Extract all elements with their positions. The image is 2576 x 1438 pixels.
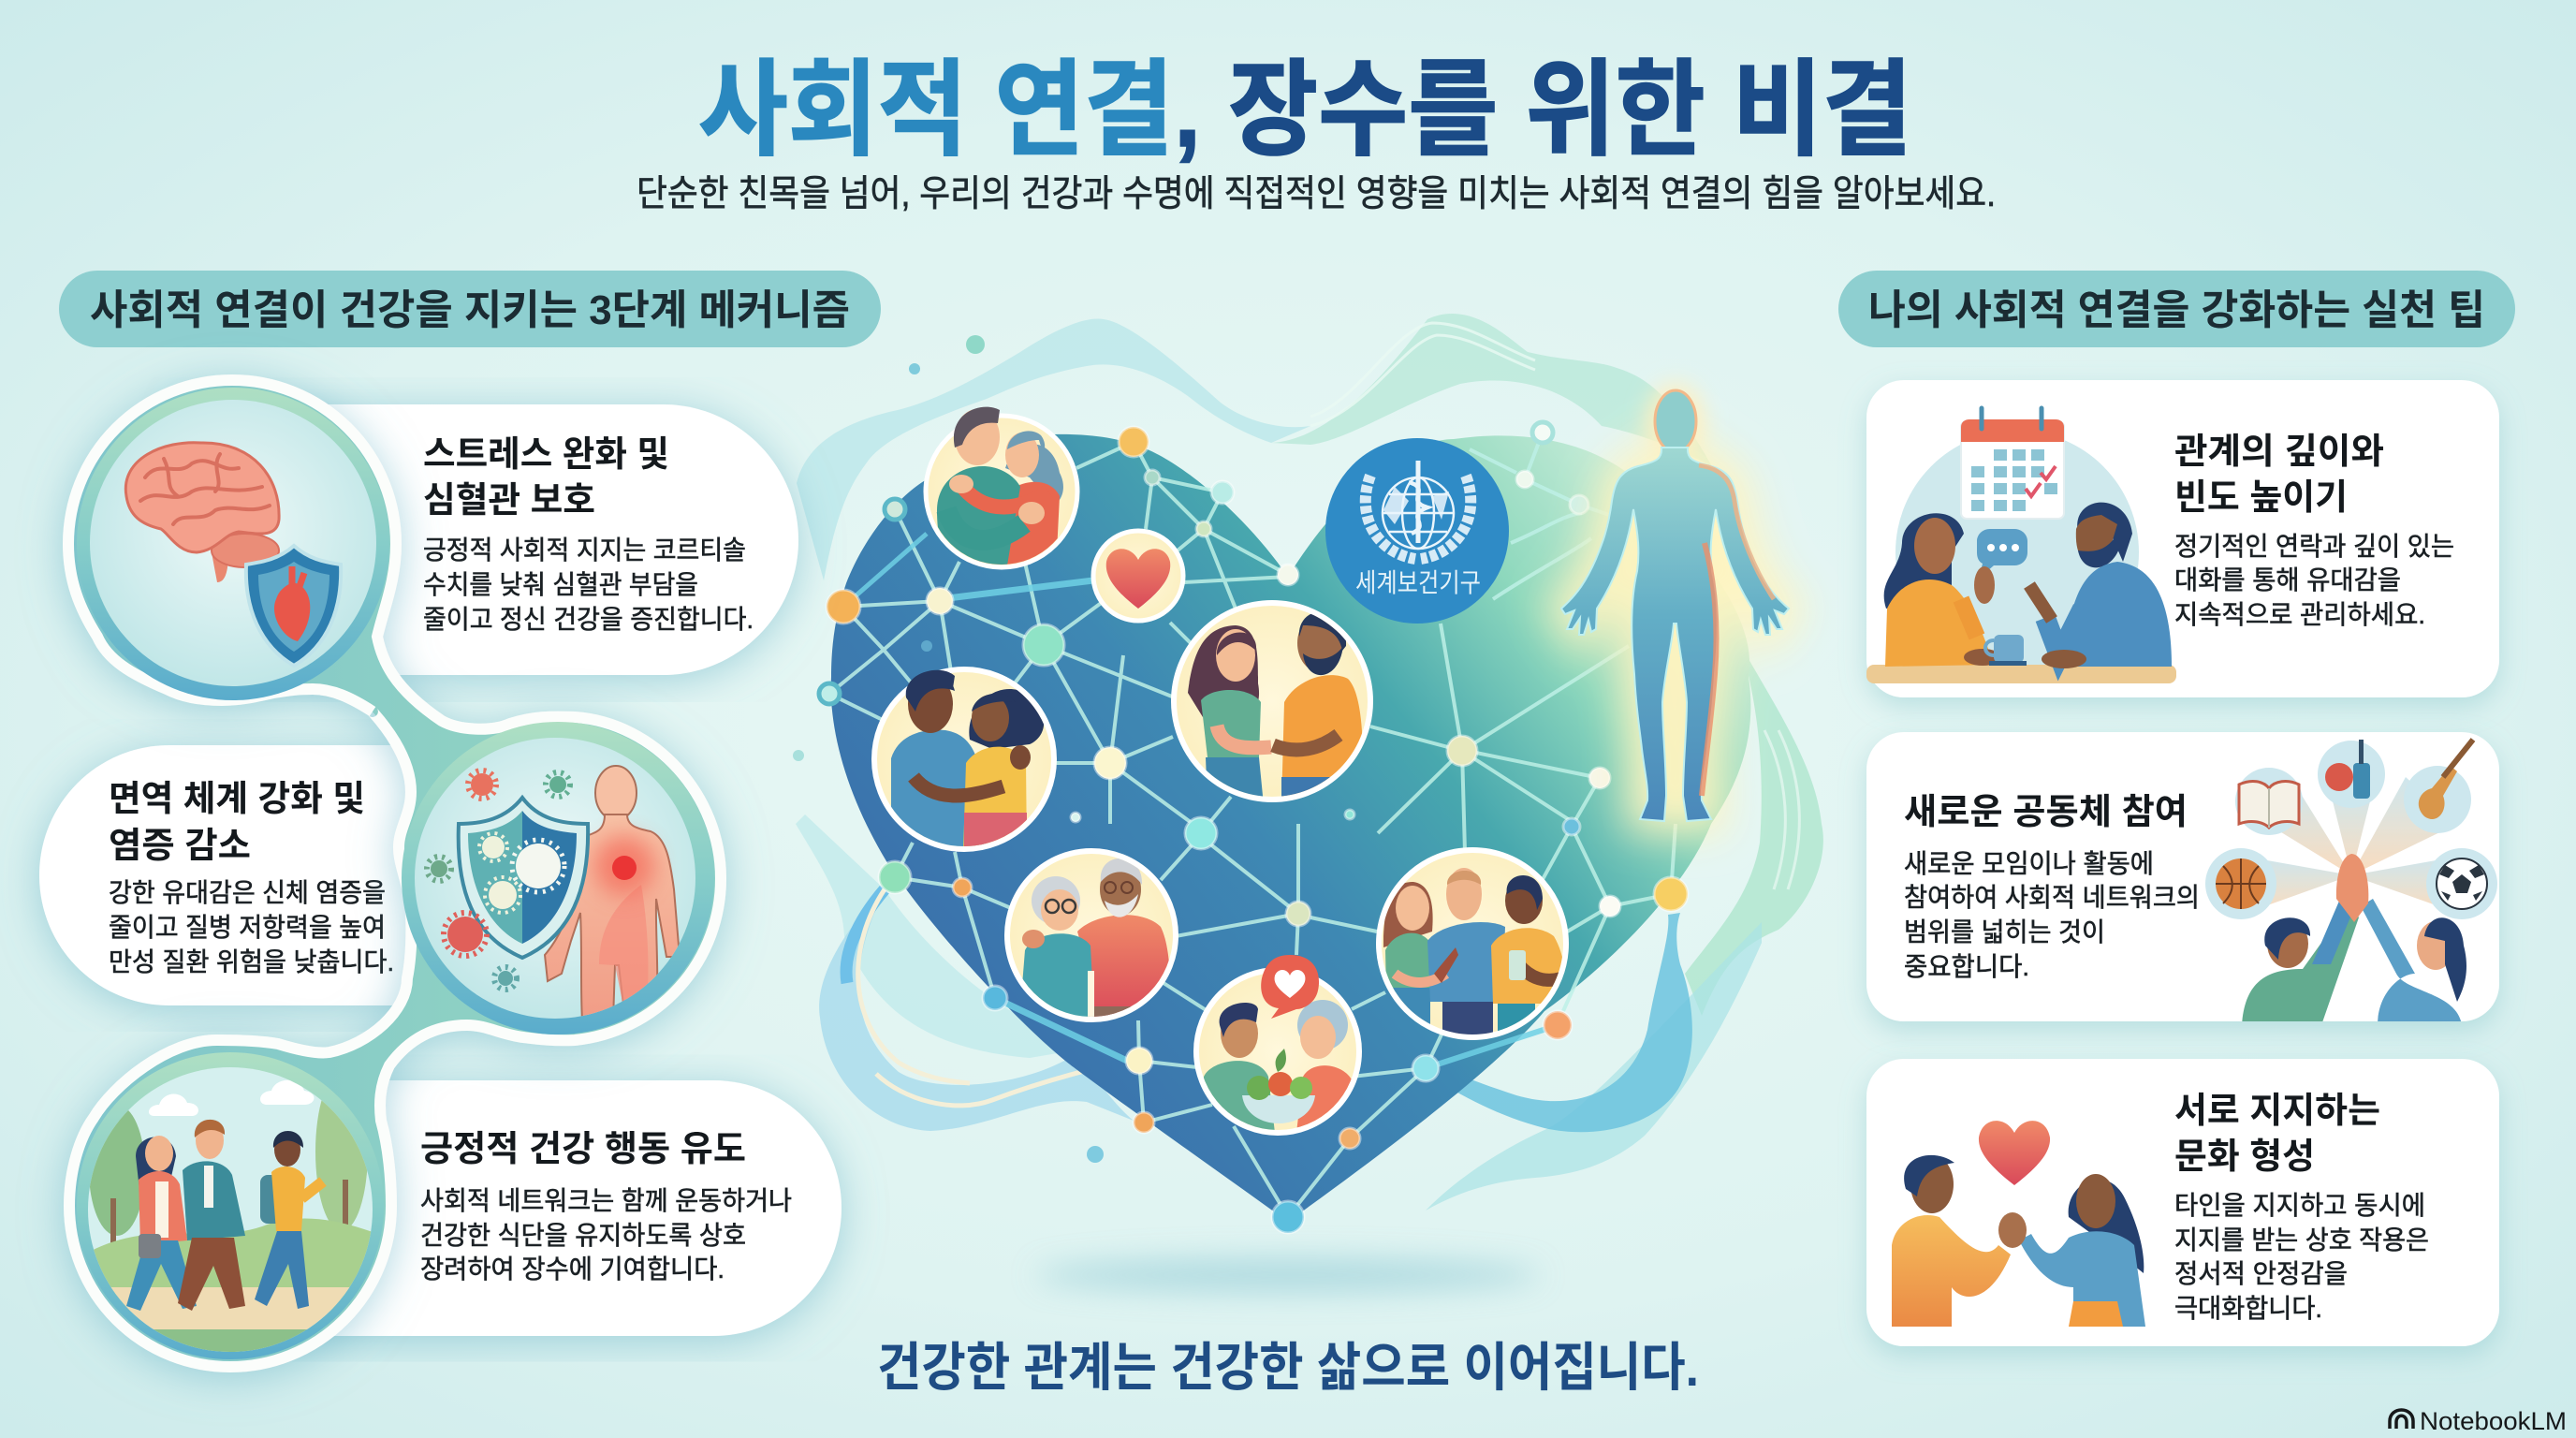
card 1: 스트레스 완화 및 [423,435,669,475]
panel: tip card 3 [1866,1059,2499,1346]
NotebookLM mark: NotebookLM [2420,1407,2567,1435]
panel: tip card 1: 지속적으로 관리하세요. [2174,600,2425,629]
panel: tip card 3: 서로 지지하는 [2174,1092,2380,1131]
panel: left heading [59,271,881,347]
WHO logo badge: 세계보건기구 [1355,568,1481,597]
card 2: 강한 유대감은 신체 염증을 [109,878,386,907]
icon: soccer ball [2437,858,2487,909]
panel: mechanism column [39,380,842,1367]
card 3: 건강한 식단을 유지하도록 상호 [420,1221,746,1250]
circle: sharing food [1196,955,1359,1133]
card 1: 줄이고 정신 건강을 증진합니다. [423,605,754,634]
panel: tip card 3: 타인을 지지하고 동시에 [2174,1191,2425,1220]
icon: shield [459,798,588,958]
person: man [1892,1155,2011,1327]
person: woman [126,1136,197,1311]
panel: tip card 1: 대화를 통해 유대감을 [2174,565,2401,594]
card 1: 수치를 낮춰 심혈관 부담을 [423,570,698,599]
subtitle: 단순한 친목을 넘어, 우리의 건강과 수명에 직접적인 영향을 미치는 사회적 연결의 힘을 알아보세요. [637,174,1996,214]
icon: medical bottle [2325,740,2370,799]
icon: basketball [2216,858,2266,909]
card 2: 줄이고 질병 저항력을 높여 [109,913,386,942]
panel: tip card 2 [1866,732,2499,1025]
icon: germs [427,770,570,990]
panel: tip card 1: 관계의 깊이와 [2174,433,2384,472]
title [698,51,1912,169]
illustration: conversation and calendar [1866,408,2176,683]
WHO logo badge [1325,438,1509,624]
person: third walker [255,1131,323,1309]
panel: tip card 2: 중요합니다. [1904,952,2029,981]
panel: tip card 3: 지지를 받는 상호 작용은 [2174,1225,2429,1255]
person: woman [1884,513,2001,667]
icon: speech bubble [1977,529,2027,579]
panel: tip card 1 [1866,380,2499,697]
title: , 장수를 위한 비결 [1174,51,1912,169]
speech heart bubble [1261,955,1319,1019]
panel: tip card 3: 극대화합니다. [2174,1294,2322,1323]
card 2 [39,745,449,1005]
circle: elderly couple [1007,851,1176,1021]
network links [829,433,1676,1217]
illustration: hobbies and high five [2205,740,2497,1025]
circle: couple smiling [1174,603,1370,805]
icon: coffee cup [1985,635,2027,666]
icon: calendar [1961,408,2064,519]
panel: tip card 1: 정기적인 연락과 깊이 있는 [2174,532,2454,561]
panel: tip card 3: 문화 형성 [2174,1137,2315,1177]
ground shadow [1035,1258,1541,1292]
card 3 [187,1080,842,1336]
icon: heart shield [246,546,341,666]
icon: inflamed body [545,766,680,1020]
circle 1: brain and heart shield [77,388,389,700]
human body figure [1561,384,1789,821]
card 3: 사회적 네트워크는 함께 운동하거나 [420,1186,792,1215]
panel: tip card 2: 범위를 넓히는 것이 [1904,917,2105,946]
card 3: 긍정적 건강 행동 유도 [420,1130,746,1169]
card 1: 긍정적 사회적 지지는 코르티솔 [423,536,746,565]
circle: hugging couple [874,669,1054,852]
person: man [2029,503,2172,668]
central heart network [793,314,1823,1292]
heart shape [831,434,1750,1222]
flowing ribbons [796,314,1823,1211]
circle 2: immune shield and body [402,722,714,1034]
panel: tip card 2: 참여하여 사회적 네트워크의 [1904,883,2200,912]
icon: heart [1979,1121,2050,1185]
panel: tip card 2: 새로운 공동체 참여 [1904,793,2188,832]
icon: brain [125,443,279,582]
card 1: 심혈관 보호 [423,481,595,521]
card 2: 만성 질환 위험을 낮춥니다. [109,947,394,976]
closing message: 건강한 관계는 건강한 삶으로 이어집니다. [877,1338,1699,1397]
card 3: 장려하여 장수에 기여합니다. [420,1255,724,1284]
clasped hands [1998,1212,2027,1248]
circle: heart [1093,531,1183,621]
panel: right heading: 나의 사회적 연결을 강화하는 실천 팁 [1868,287,2485,333]
circle 3: friends walking in park [77,1052,384,1367]
people reaching hands [2242,854,2466,1025]
card 2: 면역 체계 강화 및 [109,780,365,819]
network nodes [793,335,1688,1233]
card 2: 염증 감소 [109,827,251,866]
title: 사회적 연결 [698,51,1174,169]
circle: embracing couple [926,407,1077,571]
illustration: mutual support [1892,1121,2145,1327]
icon: guitar [2419,740,2473,819]
panel: right heading [1838,271,2515,347]
circle: group of friends [1379,850,1566,1039]
card 1 [187,404,798,675]
person: woman [2019,1174,2145,1327]
panel: tip card 3: 정서적 안정감을 [2174,1259,2348,1288]
continuous ring blob joining the circles [68,380,721,1367]
panel: tip card 1: 빈도 높이기 [2174,478,2348,518]
person: man [178,1120,245,1311]
icon: book [2239,782,2299,828]
panel: tip card 2: 새로운 모임이나 활동에 [1904,849,2154,878]
panel: left heading: 사회적 연결이 건강을 지키는 3단계 메커니즘 [90,287,850,333]
